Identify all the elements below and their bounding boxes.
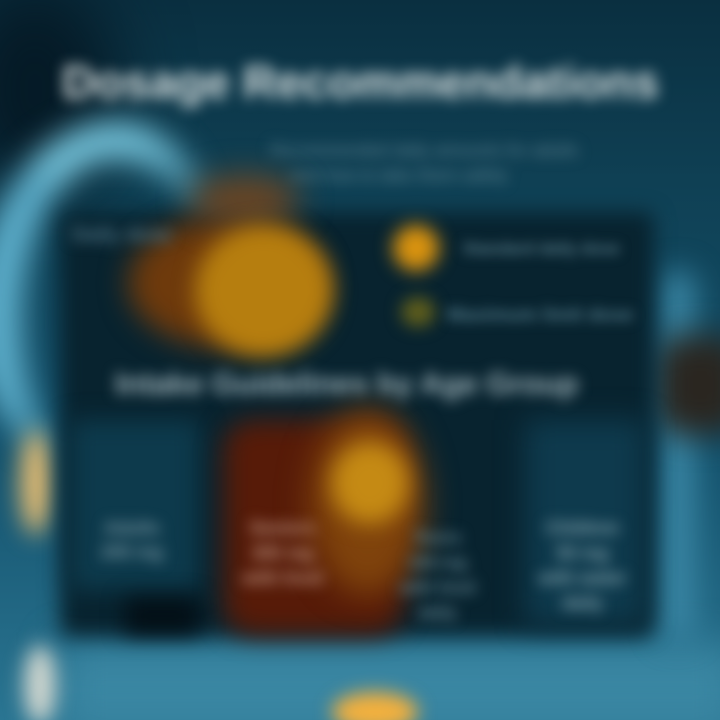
panel heading: Daily dose [72,224,172,246]
column 1 text: Adults [104,518,160,538]
bottom orange shape [332,692,418,720]
legend text: Standard daily dose [463,240,620,258]
legend item: large dose [380,212,622,284]
column 2 text: 300 mg [251,543,314,563]
gold circle [331,442,409,524]
inner gold circle [195,225,333,357]
brown red fill [223,420,403,635]
column 4 text: with water [538,568,626,588]
top halo [190,175,300,225]
column 2 text [238,515,328,592]
left yellow shape [20,430,52,535]
legend text: Maximum limit dose [447,304,633,326]
column 3 text: with food [400,578,475,597]
legend item: small dose [393,288,636,336]
orange halo [310,410,425,595]
subtitle: and how to take them safely [289,165,507,185]
title: Dosage Recommendations [62,56,659,108]
column 1 text: 200 mg [101,542,163,562]
column dark accent [125,598,200,634]
column 3 text: daily [418,603,457,622]
column 4 text: daily [562,593,603,613]
section heading: Intake Guidelines by Age Group [115,366,578,401]
panel: lower column left [70,420,200,590]
panel: main dark card [60,212,654,637]
icon: orange dot [393,225,439,271]
circle chart: dosage amount [112,156,350,373]
right blue streak [660,270,695,640]
background glow: light blue bottom [60,645,720,720]
outer brown halo [128,218,323,348]
column 3 text: 100 mg [408,553,467,572]
left white shape [24,645,56,720]
right brown shape [655,335,720,435]
column 4 text: Children [546,518,619,538]
subtitle: Recommended daily amounts for adults [270,140,578,160]
panel: highlighted red column [208,392,446,655]
column 2 text: with food [242,568,322,588]
subtitle [270,140,578,186]
column 4 text [534,514,630,618]
background glow: dark corner [0,0,120,200]
column 1 text [98,516,168,566]
panel: lower right column [525,420,645,625]
decorative light blue arc [0,122,210,452]
icon: olive dot [401,297,435,327]
column 2 text: Seniors [249,518,316,538]
column 3 text [395,525,480,625]
column 3 text: Teens [414,528,461,547]
column 4 text: 50 mg [556,543,609,563]
